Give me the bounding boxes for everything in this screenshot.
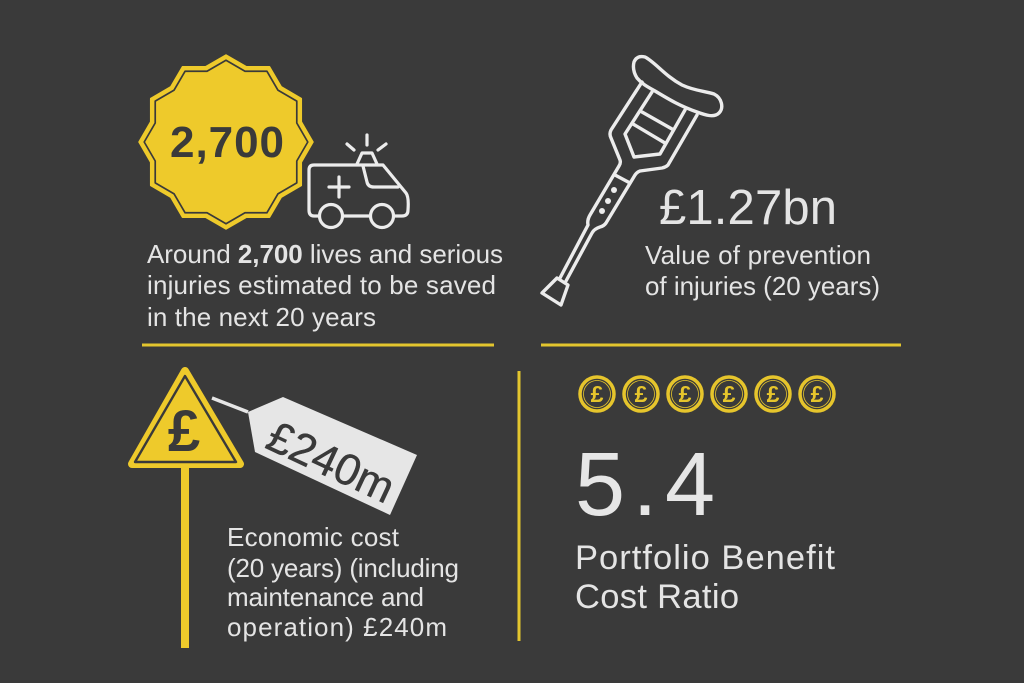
text: lives saved description: Around 2,700 lives and serious <box>147 239 503 269</box>
icon: row of six pound coins: £ <box>591 381 604 407</box>
icon: warning sign with pound <box>132 371 240 648</box>
text: lives saved description: injuries estimated to be saved <box>147 270 496 300</box>
text: economic cost description: (20 years) (including <box>227 553 459 583</box>
panel: benefit cost ratio <box>575 377 835 616</box>
panel: economic cost <box>132 371 459 648</box>
text: economic cost description <box>227 522 459 642</box>
icon: row of six pound coins <box>580 377 834 411</box>
icon: row of six pound coins: £ <box>635 381 648 407</box>
text: portfolio benefit cost ratio: Portfolio Benefit <box>575 539 835 577</box>
text: economic cost description: Economic cost <box>227 522 400 552</box>
panel: lives saved <box>139 55 503 332</box>
icon: row of six pound coins: £ <box>723 381 736 407</box>
icon: yellow badge with 2,700 <box>139 55 313 229</box>
icon: price tag £240m <box>212 397 417 515</box>
panel: value of prevention <box>542 57 880 305</box>
icon: ambulance <box>309 135 408 228</box>
text: value of prevention description: Value of prevention <box>645 240 871 270</box>
text: value of prevention description: of injuries (20 years) <box>645 271 880 301</box>
icon: crutch <box>542 57 722 305</box>
heading: £1.27bn: £1.27bn <box>659 181 837 235</box>
icon: row of six pound coins: £ <box>679 381 692 407</box>
text: lives saved description: in the next 20 years <box>147 302 376 332</box>
text: economic cost description: operation) £240m <box>227 612 447 642</box>
text: lives saved description <box>147 239 503 332</box>
icon: yellow badge with 2,700: 2,700 <box>170 118 284 167</box>
text: value of prevention description <box>645 240 880 301</box>
heading: 5.4: 5.4 <box>575 435 715 535</box>
icon: row of six pound coins: £ <box>767 381 780 407</box>
text: portfolio benefit cost ratio <box>575 539 835 616</box>
icon: price tag £240m: £240m <box>259 412 402 513</box>
icon: warning sign with pound: £ <box>168 399 200 464</box>
text: economic cost description: maintenance and <box>227 582 424 612</box>
icon: row of six pound coins: £ <box>811 381 824 407</box>
text: portfolio benefit cost ratio: Cost Ratio <box>575 578 739 616</box>
